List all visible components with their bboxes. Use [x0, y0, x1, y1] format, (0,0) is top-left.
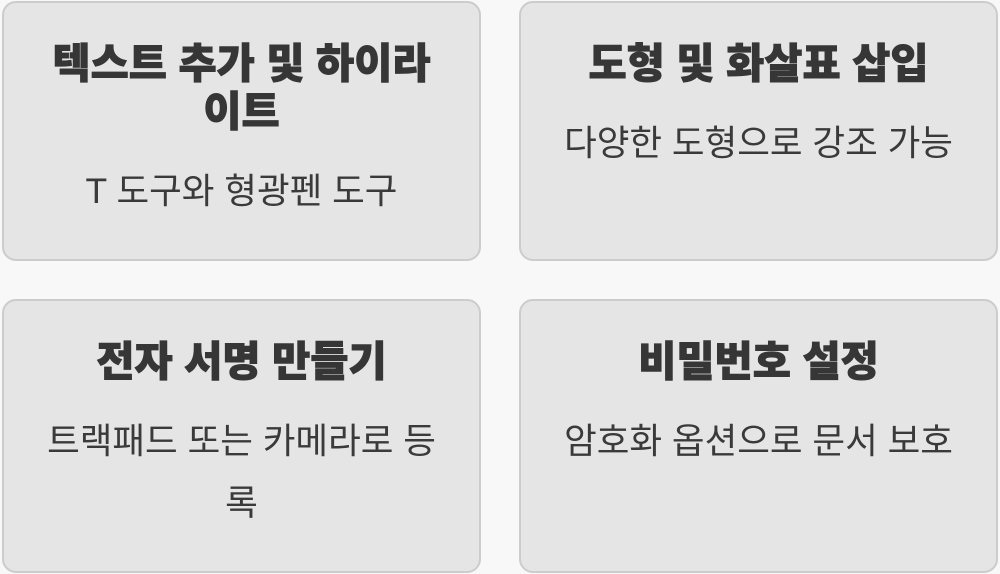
text: signature registration: 트랙패드 또는 카메라로 등 [47, 421, 436, 461]
text: signature registration: 록 [225, 483, 258, 523]
text: shape emphasis: 다양한 도형으로 강조 가능 [564, 123, 953, 163]
text: text and highlight tools: T 도구와 형광펜 도구 [86, 171, 397, 211]
heading: password setting: 비밀번호 설정 [638, 338, 879, 385]
heading: shapes and arrows: 도형 및 화살표 삽입 [588, 40, 929, 87]
heading: electronic signature: 전자 서명 만들기 [96, 338, 387, 385]
panel: electronic signature [2, 299, 481, 573]
text: signature registration [47, 421, 436, 523]
heading: text and highlight [52, 40, 431, 135]
panel: shapes and arrows [519, 1, 998, 261]
panel: password setting [519, 299, 998, 573]
panel: text and highlight [2, 1, 481, 261]
heading: text and highlight: 텍스트 추가 및 하이라 [52, 40, 431, 87]
text: document protection: 암호화 옵션으로 문서 보호 [564, 421, 953, 461]
heading: text and highlight: 이트 [203, 88, 280, 135]
